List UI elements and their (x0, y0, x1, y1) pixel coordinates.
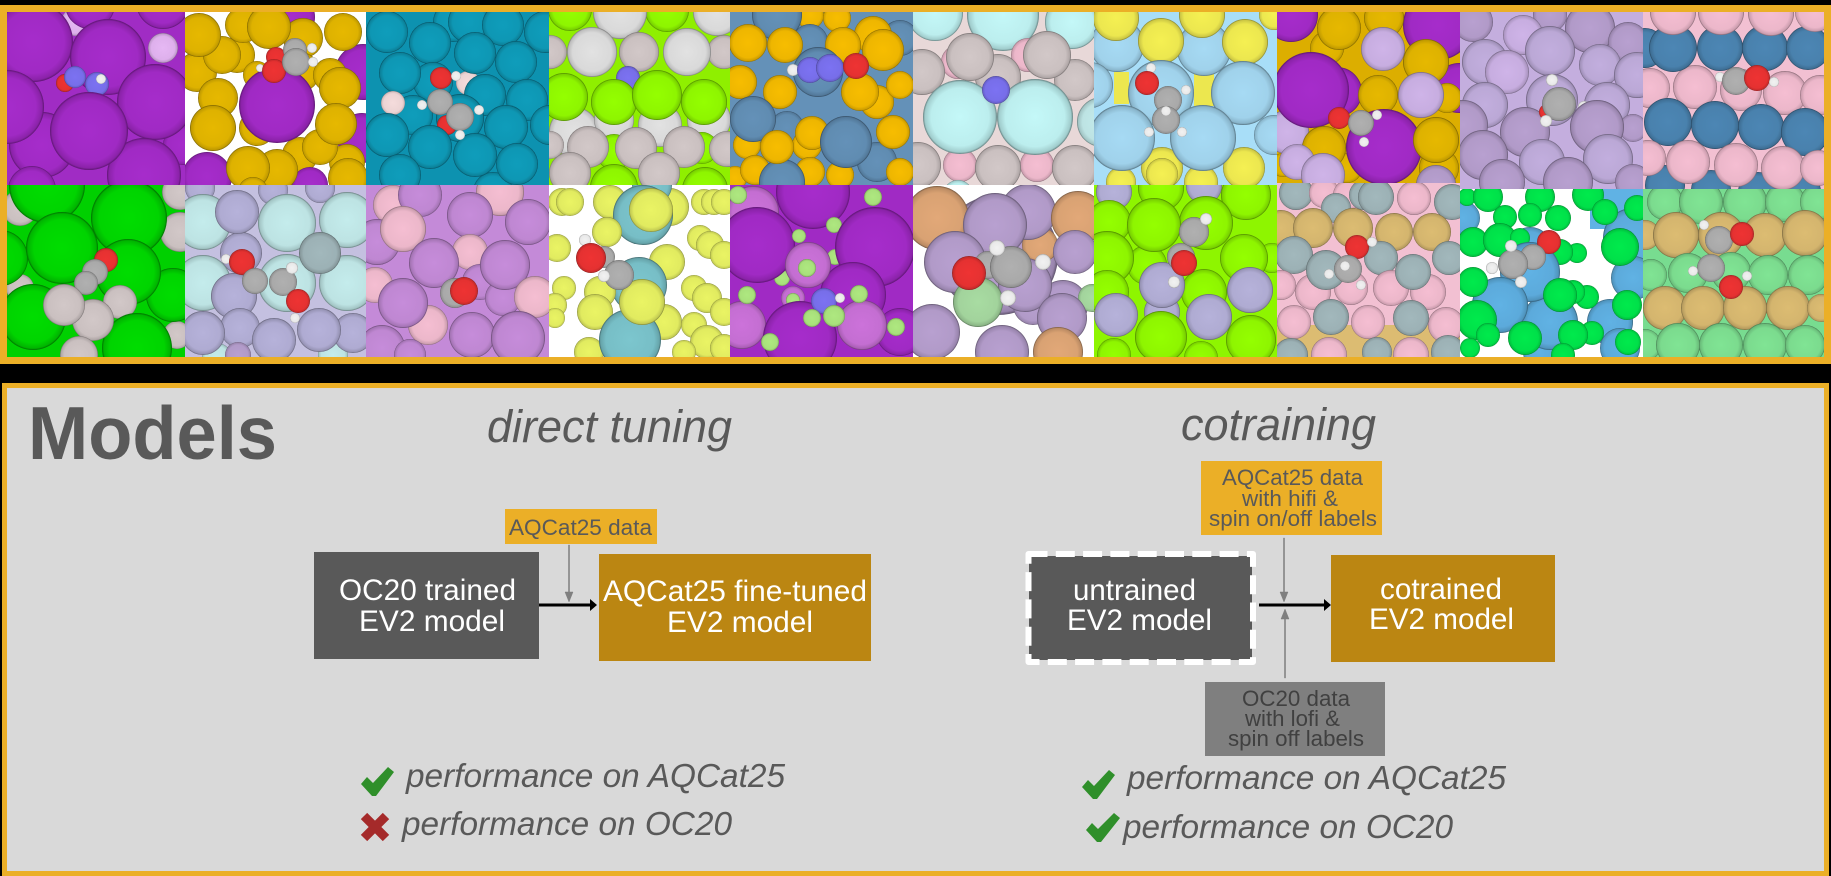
box: untrained EV2 model: untrained (1073, 574, 1196, 607)
box: OC20 trained EV2 model: EV2 model (359, 605, 505, 638)
tile: row 2 column 4 (549, 185, 730, 357)
tile: row 1 column 1 (7, 12, 185, 185)
tile: row 2 column 6 (913, 185, 1094, 357)
label: OC20 data with lofi and spin off labels: with lofi & (1244, 706, 1340, 731)
label: AQCat25 data: AQCat25 data (509, 515, 652, 540)
tile: row 1 column 3 (366, 12, 549, 185)
tile: row 1 column 8 (1277, 12, 1460, 183)
box: OC20 trained EV2 model: OC20 trained (339, 574, 516, 607)
tile: row 2 column 10 (1643, 189, 1824, 357)
arrow: AQCat25 data into cotraining (1280, 538, 1288, 602)
label: AQCat25 data (505, 509, 657, 544)
text: performance on AQCat25: performance on AQCat25 (405, 757, 786, 794)
arrow: direct tuning flow (539, 599, 597, 611)
box: AQCat25 fine-tuned EV2 model (599, 554, 871, 661)
box: cotrained EV2 model: EV2 model (1369, 603, 1514, 636)
box: cotrained EV2 model (1331, 555, 1555, 662)
label: AQCat25 data with hifi and spin on/off labels (1201, 461, 1382, 535)
tile: row 1 column 2 (185, 12, 366, 185)
label: AQCat25 data with hifi and spin on/off labels: spin on/off labels (1209, 506, 1377, 531)
box: AQCat25 fine-tuned EV2 model: AQCat25 fine-tuned (603, 575, 867, 608)
icon: check mark (1082, 770, 1115, 799)
text: performance on OC20: performance on OC20 (1122, 808, 1454, 845)
box: cotrained EV2 model: cotrained (1380, 573, 1502, 606)
tile: row 2 column 7 (1094, 185, 1277, 357)
tile: row 2 column 1 (7, 185, 185, 357)
tile: row 2 column 2 (185, 185, 366, 357)
tile: row 1 column 6 (913, 12, 1094, 185)
tile: row 1 column 7 (1094, 12, 1277, 185)
tile: row 2 column 5 (730, 185, 913, 357)
panel: adsorbate structure gallery (0, 0, 1831, 383)
tile: row 2 column 8 (1277, 183, 1460, 357)
tile: row 2 column 9 (1460, 189, 1643, 357)
label: OC20 data with lofi and spin off labels: spin off labels (1228, 726, 1364, 751)
label: OC20 data with lofi and spin off labels: OC20 data (1242, 686, 1350, 711)
heading: Models: Models (28, 391, 277, 475)
box: AQCat25 fine-tuned EV2 model: EV2 model (667, 606, 813, 639)
box: untrained EV2 model (1028, 554, 1253, 662)
arrow: cotraining flow (1259, 599, 1331, 611)
label: OC20 data with lofi and spin off labels (1205, 682, 1385, 756)
icon: check mark (361, 767, 394, 796)
arrow: OC20 data into cotraining (1281, 609, 1289, 678)
text: performance on OC20: performance on OC20 (401, 805, 733, 842)
tile: row 1 column 5 (730, 12, 913, 185)
label: AQCat25 data with hifi and spin on/off labels: AQCat25 data (1222, 465, 1363, 490)
tile: row 1 column 9 (1460, 12, 1643, 189)
subheading: direct tuning: direct tuning (487, 401, 732, 452)
box: OC20 trained EV2 model (314, 552, 539, 659)
icon: check mark (1086, 813, 1120, 842)
label: AQCat25 data with hifi and spin on/off labels: with hifi & (1241, 486, 1338, 511)
box: untrained EV2 model: EV2 model (1067, 604, 1212, 637)
icon: cross mark (364, 816, 386, 838)
arrow: AQCat25 data into tuning (565, 545, 573, 602)
panel: models (2, 383, 1829, 876)
tile: row 1 column 10 (1643, 12, 1824, 189)
tile: row 2 column 3 (366, 185, 549, 357)
tile: row 1 column 4 (549, 12, 730, 185)
text: performance on AQCat25: performance on AQCat25 (1126, 759, 1507, 796)
subheading: cotraining: cotraining (1181, 399, 1376, 450)
